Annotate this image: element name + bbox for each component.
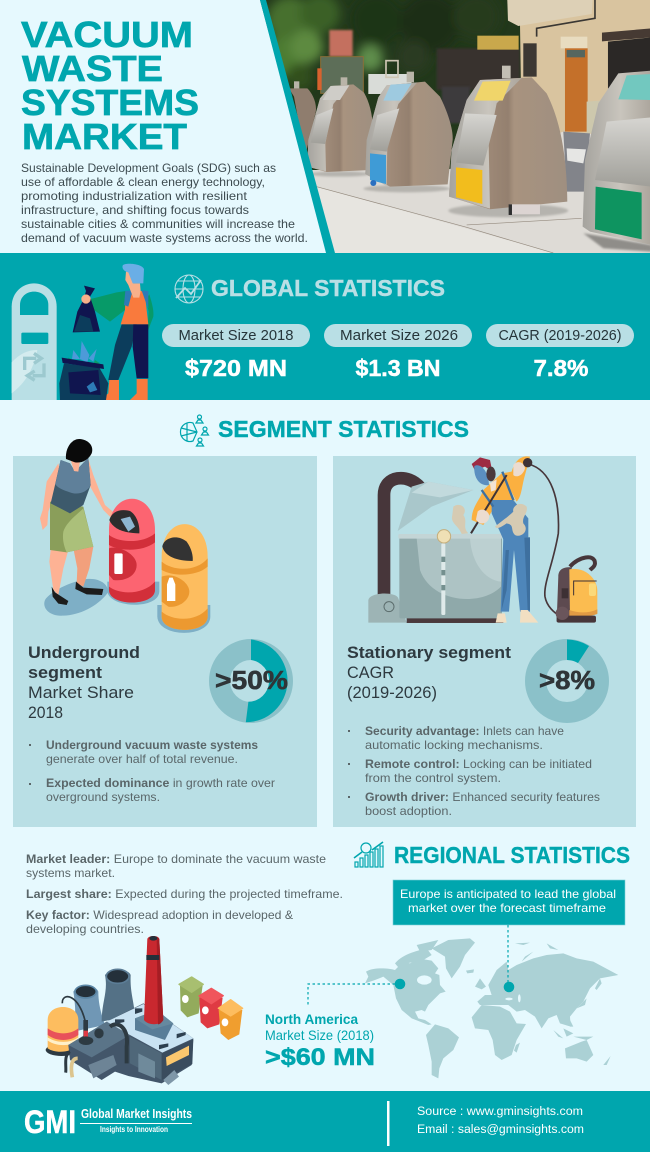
icon: rising bar chart with coin: [354, 842, 383, 867]
logo: Global Market Insights: [24, 1104, 192, 1140]
title: MARKET: [22, 116, 187, 157]
stat: market size 2018: [162, 324, 310, 381]
text: stationary segment title: (2019-2026): [347, 683, 437, 702]
bullet list: stationary: Growth driver: Enhanced security features: [365, 791, 600, 804]
panel: footer band: [0, 1091, 650, 1152]
panel: global statistics band: [0, 253, 650, 400]
intro paragraph: demand of vacuum waste systems across the world.: [21, 232, 308, 245]
stat: North America market size: North America: [265, 1011, 358, 1027]
heading: regional statistics: REGIONAL STATISTICS: [394, 842, 630, 868]
text: underground segment title: Underground: [28, 643, 140, 662]
text: stationary segment title: [347, 643, 511, 702]
text: regional highlights: systems market.: [26, 867, 115, 880]
bullet list: stationary: [348, 725, 600, 818]
bullet list: stationary: from the control system.: [365, 772, 501, 785]
divider: [387, 1101, 390, 1146]
header photo: street waste bins: [260, 0, 650, 253]
text: source and email: Source : www.gminsights.com: [417, 1104, 583, 1118]
donut chart: over 50 percent: >50%: [215, 665, 288, 695]
map pointer: North America: [308, 979, 405, 1007]
icon: segment wheel: [180, 415, 208, 446]
bullet list: underground: Underground vacuum waste systems: [46, 739, 258, 752]
title: VACUUM: [21, 14, 193, 55]
bullet list: stationary: Security advantage: Inlets can have: [365, 725, 564, 738]
donut chart: over 50 percent: [215, 640, 288, 722]
intro paragraph: Sustainable Development Goals (SDG) such as: [21, 162, 276, 175]
illustration: waste plant and bins: [46, 936, 243, 1085]
text: regional highlights: Largest share: Expected during the projected timeframe.: [26, 888, 343, 901]
illustration: worker and vacuum tank: [368, 456, 597, 623]
text: underground segment title: [28, 643, 140, 722]
intro paragraph: use of affordable & clean energy technology,: [21, 176, 265, 189]
logo: Global Market Insights: GMI: [24, 1104, 76, 1140]
teal diagonal stripe: [260, 0, 335, 253]
text: underground segment title: segment: [28, 663, 102, 682]
title: SYSTEMS: [21, 82, 199, 123]
text: regional highlights: Key factor: Widespread adoption in developed &: [26, 909, 293, 922]
text: source and email: [417, 1104, 584, 1136]
logo: Global Market Insights: Insights to Innovation: [100, 1125, 168, 1134]
callout: Europe lead: Europe is anticipated to lead the global: [400, 888, 616, 901]
text: regional highlights: Market leader: Europe to dominate the vacuum waste: [26, 853, 326, 866]
stat: CAGR: 7.8%: [534, 355, 588, 381]
text: underground segment title: 2018: [28, 703, 63, 722]
callout: Europe lead: market over the forecast timeframe: [408, 902, 606, 915]
world map: [365, 938, 618, 1078]
intro paragraph: [21, 162, 308, 245]
donut chart: over 8 percent: [536, 640, 598, 712]
donut chart: over 8 percent: >8%: [539, 665, 595, 695]
stat: market size 2018: $720 MN: [185, 355, 287, 381]
bullet list: stationary: automatic locking mechanisms.: [365, 739, 543, 752]
panel: underground segment: [13, 439, 317, 827]
stat: CAGR: CAGR (2019-2026): [498, 328, 622, 344]
bullet list: stationary: Remote control: Locking can be initiated: [365, 758, 592, 771]
heading: segment statistics: SEGMENT STATISTICS: [218, 416, 469, 442]
bullet list: underground: generate over half of total revenue.: [46, 753, 238, 766]
callout: Europe lead: [393, 880, 625, 925]
bullet list: underground: overground systems.: [46, 791, 160, 804]
heading: global statistics: GLOBAL STATISTICS: [211, 275, 445, 301]
text: stationary segment title: Stationary segment: [347, 643, 511, 662]
stat: North America market size: >$60 MN: [265, 1044, 375, 1071]
bullet list: stationary: boost adoption.: [365, 805, 452, 818]
bullet list: underground: Expected dominance in growth rate over: [46, 777, 275, 790]
icon: recycling waste bin: [12, 283, 57, 400]
illustration: person holding trash bag: [59, 264, 153, 400]
map pointer: Europe: [504, 925, 514, 992]
intro paragraph: sustainable cities & communities will increase the: [21, 218, 295, 231]
stat: market size 2026: Market Size 2026: [340, 328, 458, 344]
text: source and email: Email : sales@gminsights.com: [417, 1122, 584, 1136]
title: [21, 14, 199, 157]
text: stationary segment title: CAGR: [347, 663, 394, 682]
icon: globe chart: [175, 275, 203, 303]
stat: North America market size: [265, 1011, 375, 1071]
logo: Global Market Insights: Global Market Insights: [81, 1107, 192, 1121]
stat: North America market size: Market Size (2018): [265, 1027, 374, 1043]
intro paragraph: infrastructure, and shifting focus towards: [21, 204, 249, 217]
title: WASTE: [22, 48, 163, 89]
stat: market size 2026: [324, 324, 472, 381]
bullet list: underground: [29, 739, 275, 804]
stat: market size 2018: Market Size 2018: [178, 328, 294, 344]
stat: CAGR: [486, 324, 634, 381]
stat: market size 2026: $1.3 BN: [356, 355, 440, 381]
panel: stationary segment: [333, 456, 636, 827]
text: regional highlights: developing countries.: [26, 923, 144, 936]
illustration: woman and bins: [40, 439, 210, 633]
text: underground segment title: Market Share: [28, 683, 134, 702]
text: regional highlights: [26, 853, 343, 936]
intro paragraph: promoting industrialization with resilient: [21, 190, 248, 203]
